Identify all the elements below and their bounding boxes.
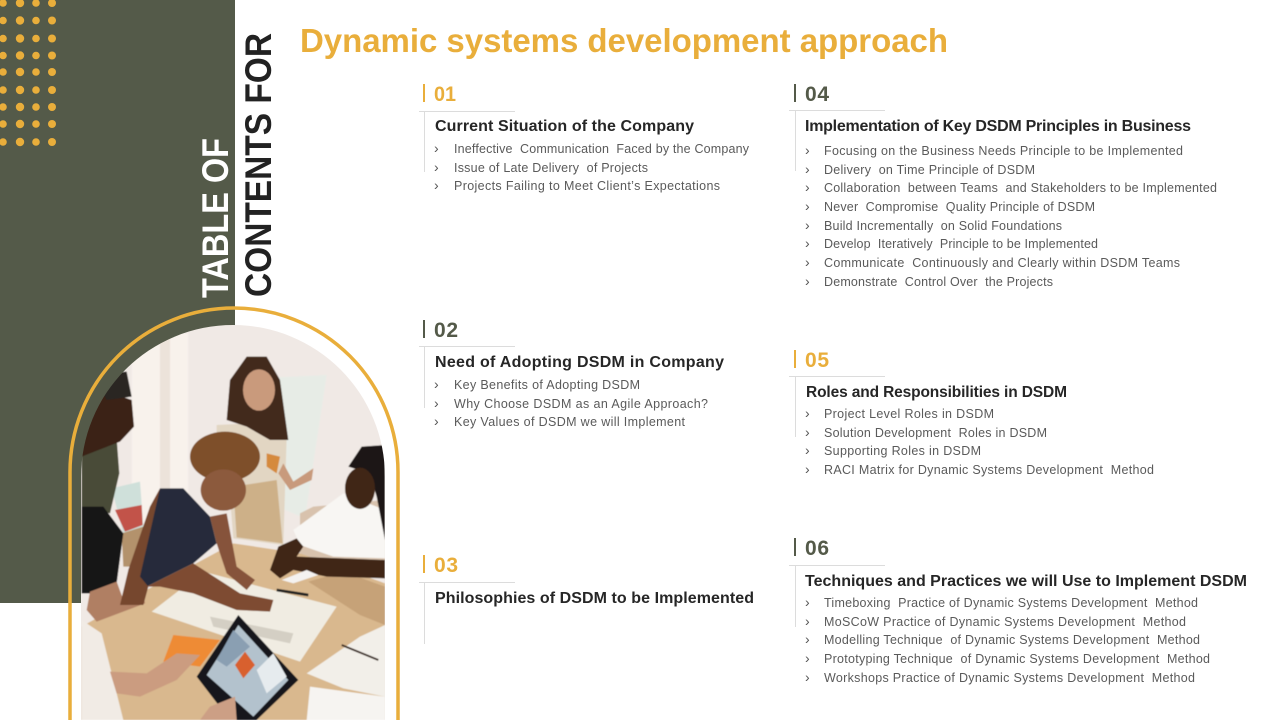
section 05 xyxy=(789,349,1154,477)
list 04 xyxy=(805,142,1217,289)
list 05: › xyxy=(805,405,810,421)
list 06 xyxy=(805,594,1210,685)
heading 01: Current Situation of the Company xyxy=(435,118,694,135)
list 04: › xyxy=(805,198,810,214)
list 06: › xyxy=(805,631,810,647)
number 04: 04 xyxy=(805,83,829,106)
number 01: 01 xyxy=(434,83,456,106)
list 04: › xyxy=(805,235,810,251)
centre woman xyxy=(190,432,260,482)
list 01: › xyxy=(434,159,439,175)
list 05: Solution Development Roles in DSDM xyxy=(824,426,1047,440)
front left hair xyxy=(82,507,123,593)
table xyxy=(82,543,385,720)
list 05: Project Level Roles in DSDM xyxy=(824,407,994,421)
list 04: Demonstrate Control Over the Projects xyxy=(824,275,1053,289)
number 06: 06 xyxy=(805,537,829,560)
list 04: Communicate Continuously and Clearly within DSDM Teams xyxy=(824,256,1180,270)
section 01 xyxy=(419,83,750,193)
arch outline xyxy=(70,308,398,720)
list 01: › xyxy=(434,140,439,156)
photo: team working around a table xyxy=(81,325,385,720)
panel: green sidebar xyxy=(0,0,235,603)
heading 06: Techniques and Practices we will Use to Implement DSDM xyxy=(805,573,1247,590)
list 02: › xyxy=(434,376,439,392)
vertical heading: table of contents for: CONTENTS FOR xyxy=(238,33,279,297)
list 06: › xyxy=(805,669,810,685)
list 06: › xyxy=(805,650,810,666)
list 06: › xyxy=(805,613,810,629)
left standing woman xyxy=(82,438,119,513)
list 06: MoSCoW Practice of Dynamic Systems Development Method xyxy=(824,615,1186,629)
list 05: RACI Matrix for Dynamic Systems Development Method xyxy=(824,463,1154,477)
list 04: Build Incrementally on Solid Foundations xyxy=(824,219,1062,233)
list 04: Collaboration between Teams and Stakeholders to be Implemented xyxy=(824,181,1217,195)
list 04: › xyxy=(805,142,810,158)
list 06: Prototyping Technique of Dynamic Systems Development Method xyxy=(824,652,1210,666)
section 03 xyxy=(419,554,754,644)
list 04: Delivery on Time Principle of DSDM xyxy=(824,163,1035,177)
list 06: › xyxy=(805,594,810,610)
front woman's shirt and arm xyxy=(82,620,123,720)
vertical heading: table of contents for: TABLE OF xyxy=(195,138,236,298)
list 05 xyxy=(805,405,1154,477)
standing woman xyxy=(217,423,287,545)
list 05: › xyxy=(805,461,810,477)
dot pattern xyxy=(0,0,56,146)
section 06 xyxy=(789,537,1247,685)
number 05: 05 xyxy=(805,349,829,372)
large plan sheet xyxy=(152,572,337,662)
list 06: Modelling Technique of Dynamic Systems Development Method xyxy=(824,633,1200,647)
list 05: › xyxy=(805,442,810,458)
list 02: Key Values of DSDM we will Implement xyxy=(454,415,686,429)
list 02: Why Choose DSDM as an Agile Approach? xyxy=(454,397,708,411)
list 04: › xyxy=(805,273,810,289)
list 06: Workshops Practice of Dynamic Systems Development Method xyxy=(824,671,1195,685)
list 01: Issue of Late Delivery of Projects xyxy=(454,161,648,175)
heading 04: Implementation of Key DSDM Principles in Business xyxy=(805,118,1191,135)
list 05: › xyxy=(805,424,810,440)
number 02: 02 xyxy=(434,319,458,342)
list 04: › xyxy=(805,254,810,270)
vertical heading: table of contents for xyxy=(195,33,279,298)
list 02: › xyxy=(434,395,439,411)
list 04: › xyxy=(805,161,810,177)
section 02 xyxy=(419,319,724,429)
list 02: › xyxy=(434,413,439,429)
number 03: 03 xyxy=(434,554,458,577)
list 04: Develop Iteratively Principle to be Implemented xyxy=(824,237,1098,251)
list 01 xyxy=(434,140,750,193)
list 04: Never Compromise Quality Principle of DSDM xyxy=(824,200,1095,214)
list 02 xyxy=(434,376,708,429)
list 04: Focusing on the Business Needs Principle to be Implemented xyxy=(824,144,1183,158)
section 04 xyxy=(789,83,1217,289)
heading 03: Philosophies of DSDM to be Implemented xyxy=(435,590,754,607)
list 01: Projects Failing to Meet Client’s Expectations xyxy=(454,179,720,193)
list 06: Timeboxing Practice of Dynamic Systems Development Method xyxy=(824,596,1198,610)
heading 05: Roles and Responsibilities in DSDM xyxy=(806,384,1067,401)
title: Dynamic systems development approach xyxy=(300,22,948,59)
heading 02: Need of Adopting DSDM in Company xyxy=(435,354,724,371)
list 02: Key Benefits of Adopting DSDM xyxy=(454,378,640,392)
list 01: › xyxy=(434,177,439,193)
list 01: Ineffective Communication Faced by the Company xyxy=(454,142,750,156)
list 05: Supporting Roles in DSDM xyxy=(824,444,981,458)
list 04: › xyxy=(805,179,810,195)
right woman xyxy=(293,493,385,558)
list 04: › xyxy=(805,217,810,233)
